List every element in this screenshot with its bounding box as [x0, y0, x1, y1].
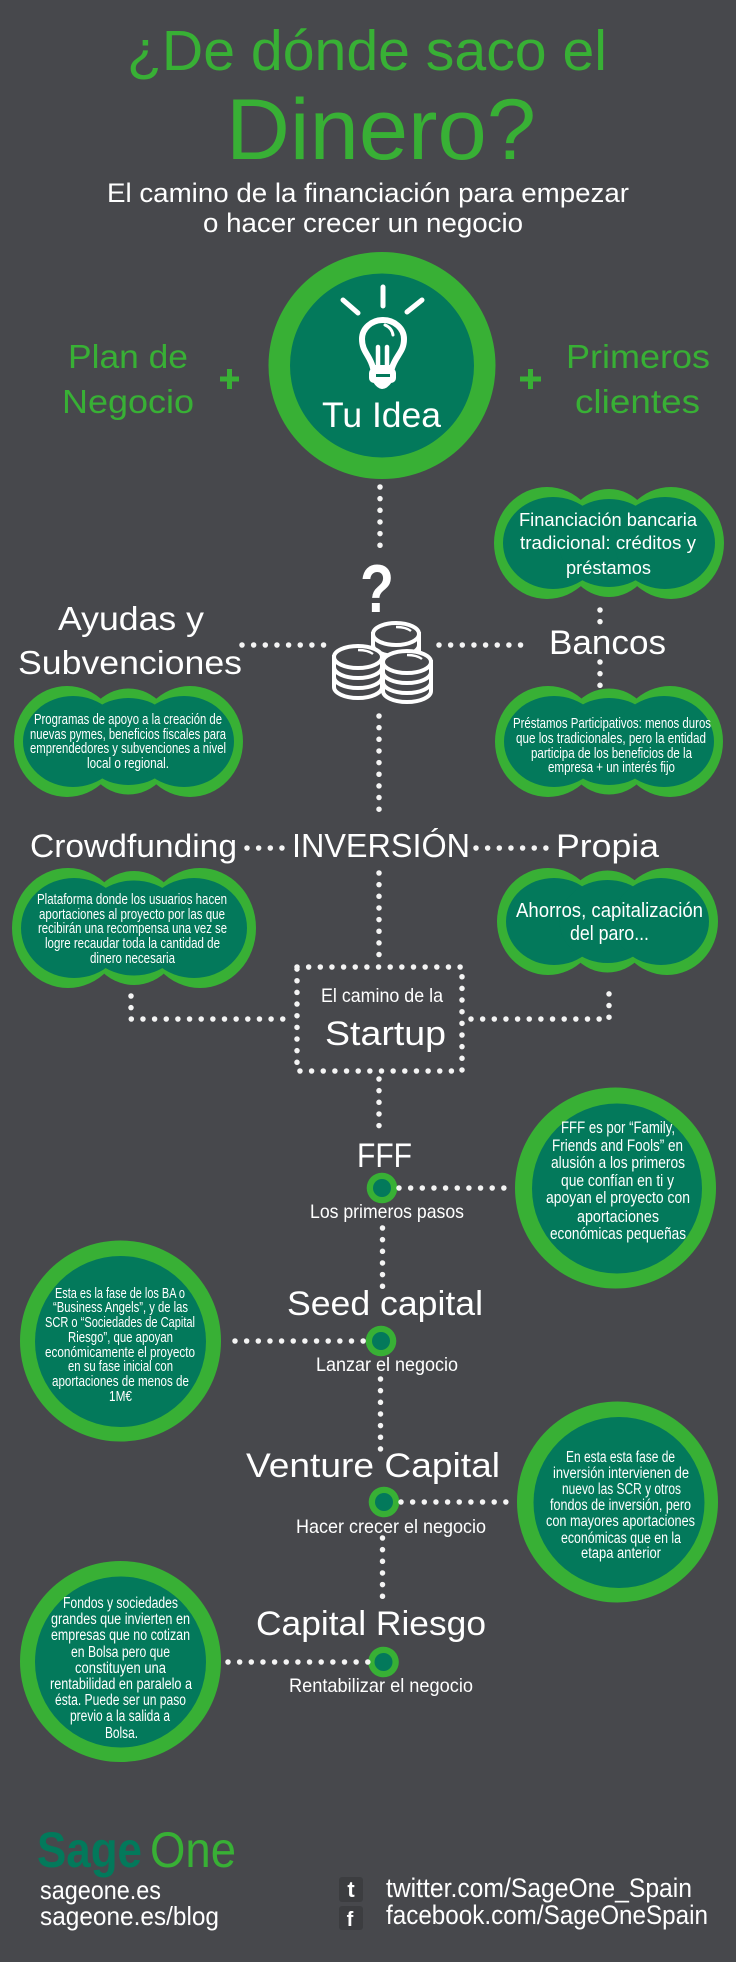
stage: fff	[310, 1137, 464, 1223]
cloud: crowdfunding description	[12, 868, 256, 988]
cloud: programas de apoyo: local o regional.	[87, 756, 169, 772]
icon: facebook: f	[347, 1909, 354, 1931]
circle: capital riesgo description: en Bolsa pero que	[71, 1644, 170, 1661]
circle: tu idea: Tu Idea	[322, 396, 442, 435]
circle: seed description: económicamente el proyecto	[45, 1345, 195, 1361]
question mark: ?	[360, 551, 394, 627]
node capital riesgo	[368, 1647, 399, 1677]
title: Dinero?	[226, 82, 536, 178]
stage: capital riesgo: Capital Riesgo	[256, 1605, 486, 1643]
cloud: programas de apoyo: nuevas pymes, beneficios fiscales para	[30, 727, 227, 743]
icon: twitter	[339, 1877, 363, 1902]
cloud: préstamos participativos: empresa + un interés fijo	[548, 760, 675, 776]
logo: sage one: One	[150, 1822, 236, 1878]
plus sign right	[520, 369, 541, 389]
dots connector propia to startup	[471, 984, 609, 1019]
dots seed to venture	[378, 1379, 383, 1451]
stage: seed capital: Lanzar el negocio	[316, 1354, 458, 1376]
circle: fff description: aportaciones	[577, 1208, 659, 1226]
website links	[40, 1875, 219, 1931]
circle: seed description: 1M€	[109, 1389, 132, 1405]
stage: seed capital	[287, 1285, 483, 1376]
heading: bancos: Bancos	[549, 624, 666, 662]
cloud: programas de apoyo	[14, 686, 243, 797]
website links: sageone.es	[40, 1875, 161, 1905]
circle: capital riesgo description: previo a la salida a	[70, 1708, 170, 1725]
cloud: financiación bancaria: préstamos	[566, 557, 651, 578]
cloud: crowdfunding description: dinero necesaria	[90, 951, 176, 967]
circle: capital riesgo description: Bolsa.	[105, 1725, 138, 1742]
title: ¿De dónde saco el	[127, 19, 607, 83]
dots startup to fff	[376, 1079, 382, 1127]
circle: seed description: aportaciones de menos de	[52, 1374, 189, 1390]
cloud: financiación bancaria	[494, 487, 724, 599]
dots coins to inversión	[376, 716, 382, 810]
circle: venture description: En esta esta fase de	[566, 1449, 675, 1466]
dots inversión to propia	[476, 845, 550, 851]
subtitle: o hacer crecer un negocio	[203, 208, 523, 238]
cloud: programas de apoyo: emprendedores y subvenciones a nivel	[30, 741, 226, 757]
circle: capital riesgo description: constituyen una	[75, 1660, 166, 1677]
dots bancos upper	[597, 610, 603, 622]
circle: seed description: Esta es la fase de los BA o	[55, 1286, 185, 1302]
circle: capital riesgo description: ésta. Puede ser un paso	[55, 1692, 186, 1709]
circle: fff description: FFF es por “Family,	[561, 1119, 675, 1137]
cloud: financiación bancaria: Financiación bancaria	[519, 509, 698, 530]
cloud: ahorros	[497, 868, 718, 975]
node seed	[366, 1326, 396, 1356]
cloud: crowdfunding description: Plataforma donde los usuarios hacen	[37, 892, 227, 908]
stage: venture capital: Venture Capital	[246, 1447, 500, 1485]
cloud: crowdfunding description: recibirán una recompensa una vez se	[38, 921, 227, 937]
heading: ayudas y subvenciones: Ayudas y	[58, 600, 205, 637]
circle: venture description: nuevo las SCR y otros	[562, 1481, 681, 1498]
circle: fff description: Friends and Fools” en	[552, 1137, 683, 1155]
circle: fff description: apoyan el proyecto con	[546, 1189, 690, 1207]
circle: seed description: Riesgo”, que apoyan	[68, 1330, 173, 1346]
circle: fff description	[515, 1088, 716, 1288]
circle: seed description: SCR o “Sociedades de Capital	[45, 1315, 195, 1331]
circle: venture description: económicas que en la	[561, 1530, 681, 1547]
plus sign left	[220, 369, 239, 389]
subtitle	[107, 178, 629, 238]
circle: seed description: “Business Angels”, y de las	[53, 1300, 188, 1316]
circle: seed description	[20, 1240, 221, 1442]
subtitle: El camino de la financiación para empezar	[107, 178, 629, 208]
dots bancos lower	[597, 662, 603, 686]
stage: seed capital: Seed capital	[287, 1285, 483, 1323]
social links	[386, 1873, 708, 1930]
box: el camino de la startup: Startup	[325, 1015, 446, 1053]
circle: venture description: fondos de inversión, pero	[550, 1497, 691, 1514]
icon: light bulb	[343, 287, 422, 389]
dots capital riesgo to circle	[228, 1659, 368, 1665]
dots left to ayudas	[242, 642, 328, 648]
box: el camino de la startup	[297, 967, 462, 1071]
stage: capital riesgo	[256, 1605, 486, 1697]
logo: sage one: Sage	[37, 1822, 142, 1878]
circle: fff description: alusión a los primeros	[551, 1154, 685, 1172]
circle: seed description: en su fase inicial con	[68, 1359, 173, 1375]
circle: venture description: con mayores aportaciones	[546, 1513, 695, 1530]
circle: venture description	[517, 1402, 718, 1602]
heading: ayudas y subvenciones: Subvenciones	[18, 644, 242, 681]
cloud: ahorros: Ahorros, capitalización	[516, 900, 703, 922]
primeros clientes label: Primeros	[566, 338, 710, 375]
primeros clientes label	[566, 338, 710, 420]
dots crowdfunding to inversión	[247, 845, 285, 851]
logo: sage one	[37, 1822, 236, 1878]
circle: capital riesgo description: empresas que no cotizan	[51, 1627, 190, 1644]
cloud: crowdfunding description: logre recaudar toda la cantidad de	[45, 936, 220, 952]
circle: fff description: que confían en ti y	[561, 1172, 675, 1190]
dots fff to seed	[380, 1228, 385, 1287]
plan de negocio label	[62, 338, 194, 420]
website links: sageone.es/blog	[40, 1901, 219, 1931]
heading: propia: Propia	[556, 828, 659, 864]
heading: crowdfunding: Crowdfunding	[30, 828, 237, 864]
heading: inversión: INVERSIÓN	[292, 827, 470, 864]
dots fff to circle	[399, 1185, 507, 1191]
social links: facebook.com/SageOneSpain	[386, 1900, 708, 1930]
node fff	[367, 1173, 397, 1203]
heading: ayudas y subvenciones	[18, 600, 242, 681]
path dots from idea to question	[377, 487, 383, 546]
cloud: financiación bancaria: tradicional: créditos y	[520, 532, 697, 553]
plan de negocio label: Plan de	[68, 338, 188, 375]
cloud: ahorros: del paro...	[570, 923, 649, 945]
cloud: crowdfunding description: aportaciones al proyecto por las que	[39, 907, 225, 923]
dots venture to capital riesgo	[380, 1538, 385, 1598]
cloud: préstamos participativos	[495, 686, 723, 797]
icon: facebook	[339, 1906, 363, 1931]
circle: fff description: económicas pequeñas	[550, 1225, 686, 1243]
cloud: préstamos participativos: participa de los beneficios de la	[531, 746, 693, 762]
primeros clientes label: clientes	[575, 383, 700, 420]
cloud: programas de apoyo: Programas de apoyo a la creación de	[34, 712, 222, 728]
stage: venture capital: Hacer crecer el negocio	[296, 1516, 486, 1538]
circle: venture description: etapa anterior	[581, 1545, 661, 1562]
dots seed to circle	[235, 1338, 366, 1344]
circle: tu idea	[268, 252, 496, 479]
node venture	[369, 1487, 399, 1517]
dots right to bancos	[439, 642, 525, 648]
plan de negocio label: Negocio	[62, 383, 194, 420]
box: el camino de la startup: El camino de la	[321, 986, 443, 1007]
social links: twitter.com/SageOne_Spain	[386, 1873, 692, 1903]
dots inversión to startup	[376, 873, 382, 957]
stage: fff: FFF	[357, 1137, 412, 1175]
circle: capital riesgo description: rentabilidad en paralelo a	[50, 1676, 192, 1693]
stage: capital riesgo: Rentabilizar el negocio	[289, 1675, 473, 1697]
stage: venture capital	[246, 1447, 500, 1538]
stage: fff: Los primeros pasos	[310, 1201, 464, 1223]
circle: venture description: inversión intervienen de	[553, 1465, 689, 1482]
title	[127, 19, 607, 178]
icon: coins	[334, 623, 431, 702]
circle: capital riesgo description	[20, 1561, 221, 1762]
circle: capital riesgo description: grandes que invierten en	[51, 1611, 190, 1628]
circle: capital riesgo description: Fondos y sociedades	[63, 1595, 178, 1612]
dots venture to circle	[401, 1499, 511, 1505]
dots connector crowdfunding to startup	[131, 996, 286, 1019]
icon: twitter: t	[347, 1877, 355, 1902]
